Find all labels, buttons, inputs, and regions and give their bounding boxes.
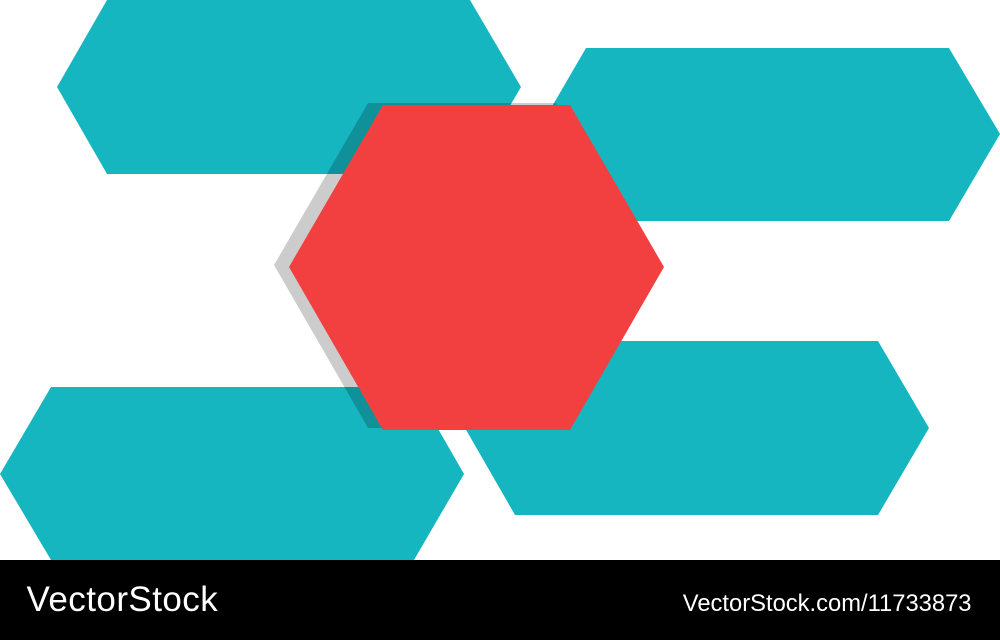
image url text: VectorStock.com/11733873 bbox=[683, 590, 972, 617]
watermark bar bbox=[0, 560, 1000, 640]
panel: bottom right hexagon bbox=[465, 341, 929, 515]
panel: top right hexagon bbox=[536, 48, 1000, 221]
panel: top left hexagon bbox=[57, 0, 521, 174]
central hexagon shadow bbox=[274, 103, 649, 428]
panel: bottom left hexagon bbox=[0, 387, 464, 560]
central red hexagon bbox=[289, 105, 664, 430]
VectorStock logo text: VectorStock bbox=[26, 580, 218, 618]
